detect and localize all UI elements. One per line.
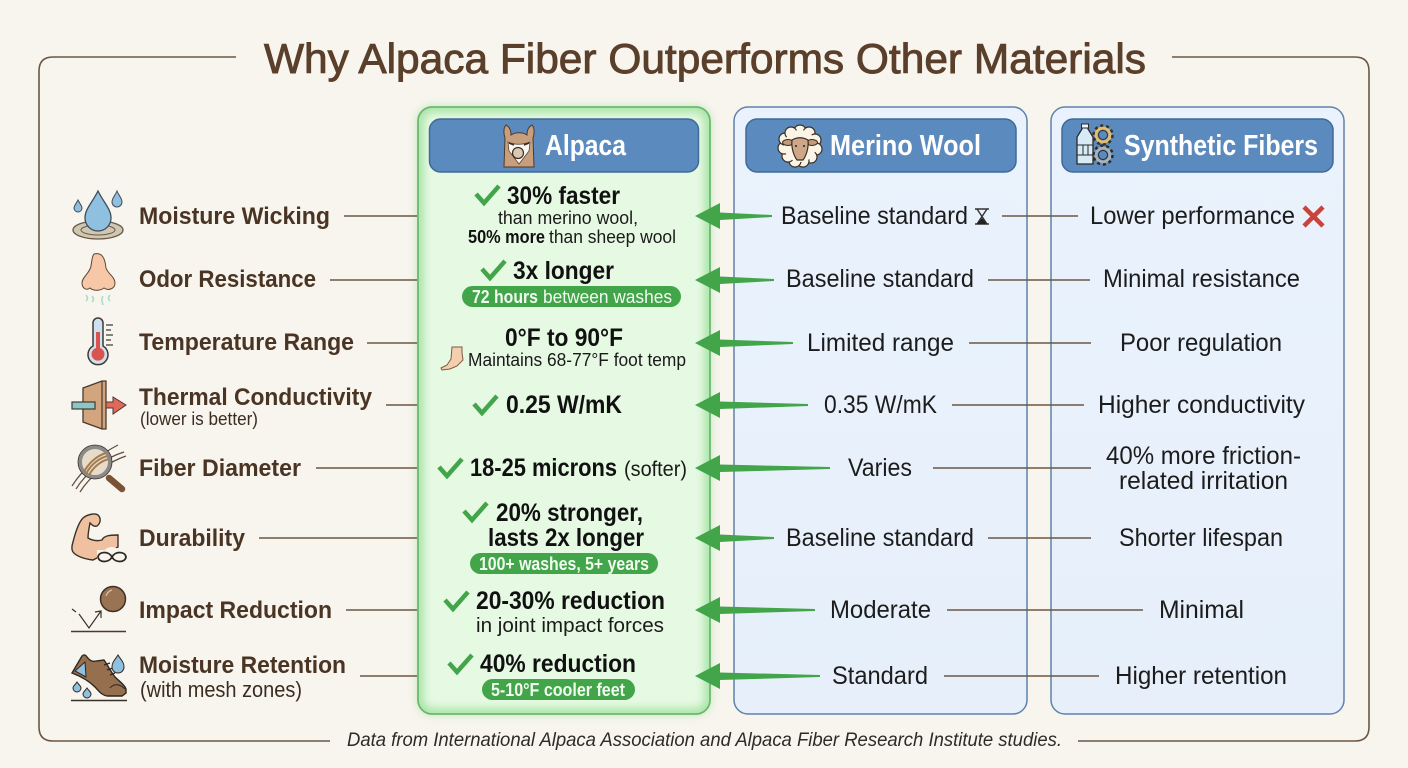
merino values: Baseline standard	[781, 202, 968, 230]
icon: water drop	[73, 191, 123, 239]
merino values	[781, 202, 989, 690]
row label: moisture wicking	[73, 191, 330, 239]
row label: moisture retention: (with mesh zones)	[140, 677, 302, 702]
row label: moisture retention: Moisture Retention	[139, 652, 346, 679]
row label: odor resistance	[82, 254, 316, 305]
row label: durability: Durability	[139, 525, 246, 552]
alpaca value: odor resistance: between washes	[543, 287, 672, 307]
alpaca value: fiber diameter	[439, 454, 687, 482]
synthetic values	[1090, 202, 1323, 690]
alpaca value: impact reduction	[445, 587, 665, 637]
synthetic values: Higher conductivity	[1098, 391, 1305, 419]
header: alpaca: Alpaca	[545, 130, 627, 162]
icon: sheep head	[778, 125, 822, 167]
header: synthetic fibers	[1062, 119, 1333, 172]
row label: temperature range: Temperature Range	[139, 329, 354, 356]
icon: magnifier on fibers	[72, 445, 126, 492]
alpaca value: moisture wicking	[468, 182, 676, 247]
icon: foot	[441, 347, 463, 370]
icon: hourglass	[975, 209, 989, 224]
alpaca value: durability: 100+ washes, 5+ years	[479, 554, 649, 574]
row label: moisture retention	[71, 652, 346, 702]
header: merino wool	[746, 119, 1016, 172]
title: Why Alpaca Fiber Outperforms Other Materials	[264, 35, 1146, 82]
row label: thermal conductivity	[72, 381, 373, 429]
merino values: Limited range	[807, 329, 954, 357]
icon: thermometer	[88, 318, 113, 365]
alpaca value: moisture wicking: than sheep wool	[549, 227, 676, 247]
alpaca value: temperature range: 0°F to 90°F	[505, 324, 623, 352]
alpaca value: odor resistance: 72 hours	[472, 287, 538, 307]
merino values: Varies	[848, 454, 912, 482]
synthetic values: Minimal resistance	[1103, 265, 1300, 293]
icon: bottle and gears	[1077, 124, 1112, 164]
alpaca value: odor resistance: 3x longer	[513, 257, 614, 285]
synthetic values: related irritation	[1119, 467, 1288, 495]
synthetic values: Poor regulation	[1120, 329, 1282, 357]
alpaca value: odor resistance	[462, 257, 681, 307]
icon: shoe with droplets	[71, 655, 127, 700]
alpaca value: moisture wicking: than merino wool,	[498, 208, 638, 228]
merino values: Standard	[832, 662, 928, 690]
row label: thermal conductivity: (lower is better)	[140, 409, 258, 429]
alpaca value: moisture retention: 5-10°F cooler feet	[491, 680, 625, 700]
alpaca value: temperature range: Maintains 68-77°F foot temp	[468, 350, 686, 370]
synthetic values: 40% more friction-	[1106, 442, 1301, 470]
alpaca value: durability: lasts 2x longer	[488, 524, 644, 552]
icon: heat through wall	[72, 381, 126, 429]
row label: durability	[72, 514, 246, 567]
alpaca value: temperature range	[441, 324, 686, 370]
merino values: Baseline standard	[786, 265, 974, 293]
row label: fiber diameter	[72, 445, 301, 492]
alpaca value: moisture wicking: 50% more	[468, 227, 545, 247]
icon: bouncing ball	[71, 586, 126, 632]
alpaca value: durability: 20% stronger,	[496, 499, 643, 527]
row label: impact reduction: Impact Reduction	[139, 597, 332, 624]
synthetic values: Lower performance	[1090, 202, 1295, 230]
alpaca value: durability	[464, 499, 658, 574]
header: alpaca	[430, 119, 698, 172]
connector lines	[259, 216, 1143, 676]
alpaca value: fiber diameter: 18-25 microns	[470, 454, 617, 482]
panel: merino wool	[734, 107, 1027, 714]
row label: thermal conductivity: Thermal Conductivity	[139, 384, 373, 411]
panel: synthetic fibers	[1051, 107, 1344, 714]
icon: nose	[82, 254, 115, 305]
icon: red cross	[1304, 207, 1323, 226]
row label: impact reduction	[71, 586, 332, 632]
panel: alpaca	[418, 107, 710, 714]
alpaca value: impact reduction: 20-30% reduction	[476, 587, 665, 615]
green arrows	[695, 203, 830, 689]
row label: temperature range	[88, 318, 354, 365]
merino values: 0.35 W/mK	[824, 391, 937, 419]
row label: fiber diameter: Fiber Diameter	[139, 455, 301, 482]
alpaca value: moisture wicking: 30% faster	[507, 182, 620, 210]
row label: moisture wicking: Moisture Wicking	[139, 203, 330, 230]
synthetic values: Minimal	[1159, 596, 1244, 624]
header: merino wool: Merino Wool	[830, 130, 981, 162]
synthetic values: Higher retention	[1115, 662, 1287, 690]
alpaca value: impact reduction: in joint impact forces	[476, 614, 664, 637]
alpaca value: moisture retention	[449, 650, 636, 700]
footer source note: Data from International Alpaca Association and Alpaca Fiber Research Institute studies.	[347, 730, 1062, 751]
alpaca value: moisture retention: 40% reduction	[480, 650, 636, 678]
icon: flexed arm with infinity	[72, 514, 127, 567]
merino values: Moderate	[830, 596, 931, 624]
icon: alpaca head	[504, 125, 534, 167]
merino values: Baseline standard	[786, 524, 974, 552]
row label: odor resistance: Odor Resistance	[139, 266, 316, 293]
synthetic values: Shorter lifespan	[1119, 524, 1283, 552]
alpaca value: fiber diameter: (softer)	[624, 458, 687, 481]
header: synthetic fibers: Synthetic Fibers	[1124, 130, 1318, 162]
alpaca value: thermal conductivity: 0.25 W/mK	[506, 391, 622, 419]
